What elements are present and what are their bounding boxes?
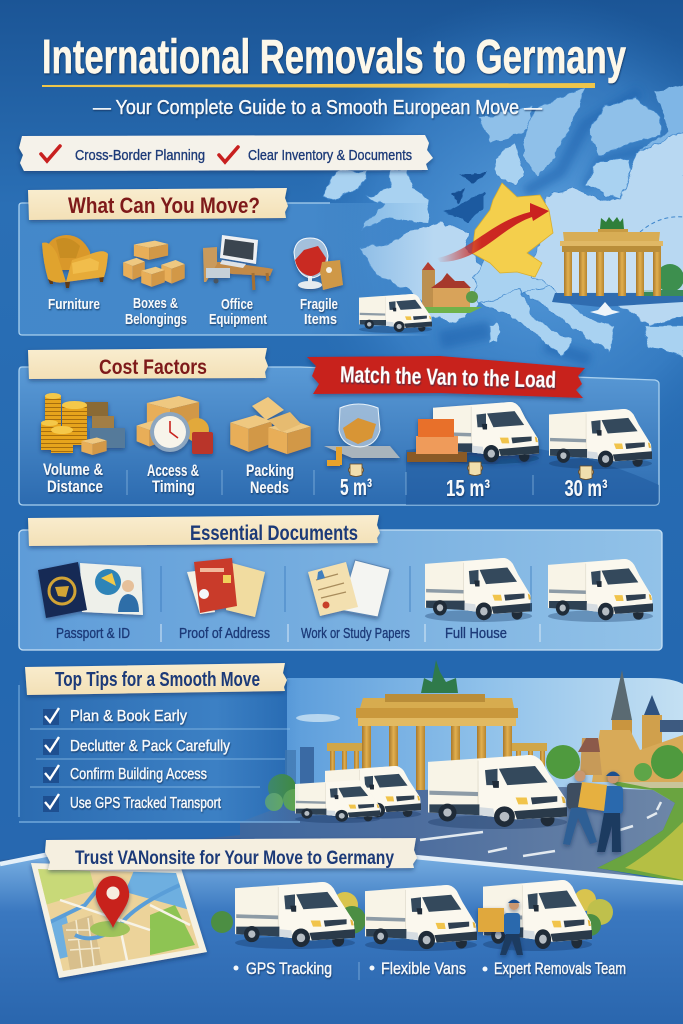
heading: top tips: Top Tips for a Smooth Move xyxy=(55,669,260,691)
title underline xyxy=(42,83,595,88)
icon and label: 15 m3: 15 m³ xyxy=(446,475,490,501)
label: fragile items: Fragile xyxy=(300,296,338,313)
banner: match the van to the load: Match the Van to the Load xyxy=(340,361,556,393)
icon: fleet van one xyxy=(235,882,355,949)
icon and label: 30 m3: 30 m³ xyxy=(564,475,608,501)
heading: essential documents xyxy=(28,515,380,546)
icon: fleet van two xyxy=(365,885,477,951)
tip: confirm building access: Confirm Building Access xyxy=(70,766,207,783)
tip: plan and book early: Plan & Book Early xyxy=(70,708,187,725)
banner: trust VANonsite: Trust VANonsite for Your Move to Germany xyxy=(75,848,394,869)
icon: bushes behind vans xyxy=(211,889,613,936)
icon: packing boxes xyxy=(230,397,311,454)
benefit strip: Cross-Border Planning xyxy=(75,147,205,164)
label: GPS tracking: GPS Tracking xyxy=(246,959,332,978)
icon: second van xyxy=(548,559,653,622)
icon and label: 5 m3: 5 m³ xyxy=(340,474,372,500)
heading: top tips xyxy=(25,663,287,695)
icon: coins and boxes xyxy=(41,393,125,455)
icon: small van xyxy=(295,780,380,823)
icon: red check two xyxy=(219,147,238,162)
label: packing needs xyxy=(246,461,294,497)
panel: essential documents xyxy=(19,515,662,650)
benefit strip: Clear Inventory & Documents xyxy=(248,147,412,164)
heading: cost factors xyxy=(28,348,268,379)
label: proof of address: Proof of Address xyxy=(179,625,270,642)
icon: proof of address xyxy=(187,558,265,617)
dividers xyxy=(161,566,531,612)
tip: use GPS tracked transport xyxy=(43,794,221,812)
label: fragile items: Items xyxy=(304,311,337,328)
label: office equipment: Equipment xyxy=(209,311,267,328)
icon: pallet and 15 m3 van xyxy=(407,402,539,464)
road xyxy=(0,787,683,900)
panel: what can you move xyxy=(19,188,434,335)
label: office equipment xyxy=(209,296,267,328)
icon: work or study papers xyxy=(308,560,390,617)
icon: cathedral and trees xyxy=(546,670,683,782)
icon: office desk xyxy=(203,235,273,290)
icon: van on map xyxy=(359,294,432,333)
label: packing needs: Packing xyxy=(246,461,294,480)
dividers xyxy=(127,470,533,495)
tip: use GPS tracked transport: Use GPS Tracked Transport xyxy=(70,795,221,812)
label: access and timing: Access & xyxy=(147,461,199,480)
label: flexible vans: Flexible Vans xyxy=(381,959,466,978)
label: expert removals team: Expert Removals Team xyxy=(494,959,626,978)
benefit strip xyxy=(19,135,433,171)
icon: Brandenburg Gate xyxy=(285,660,547,790)
icon: Brandenburg Gate on map xyxy=(552,217,683,316)
label: access and timing xyxy=(147,461,199,496)
panel: top tips xyxy=(19,663,300,822)
icon: large van xyxy=(428,755,567,829)
icon: movers carrying box xyxy=(563,770,623,852)
panel: cost factors xyxy=(19,348,659,505)
banner: match the van to the load xyxy=(307,356,585,398)
icon: fragile items xyxy=(294,238,343,290)
heading: cost factors: Cost Factors xyxy=(99,356,207,379)
heading: what can you move: What Can You Move? xyxy=(68,193,260,218)
icon: full house van xyxy=(425,558,532,622)
banner: trust VANonsite xyxy=(45,838,417,870)
label: boxes and belongings: Boxes & xyxy=(133,295,178,312)
icon: red check xyxy=(41,146,60,161)
icon and label: 30 m3 xyxy=(564,466,608,501)
map of Europe xyxy=(323,84,683,360)
subtitle: — Your Complete Guide to a Smooth European Move — xyxy=(93,97,542,119)
icon: middle van xyxy=(325,766,421,819)
tip: confirm building access xyxy=(43,765,207,783)
icon: moving boxes xyxy=(123,241,185,287)
icon: armchair xyxy=(42,235,108,288)
label: packing needs: Needs xyxy=(250,478,289,497)
label: fragile items xyxy=(300,296,338,328)
label: full house: Full House xyxy=(445,625,507,642)
icon: Germany highlighted with arrow xyxy=(437,183,553,277)
heading: essential documents: Essential Documents xyxy=(190,522,358,545)
label: volume and distance xyxy=(43,460,103,496)
label: work or study papers: Work or Study Papers xyxy=(301,625,410,642)
icon and label: 5 m3 xyxy=(340,464,372,500)
icon: tree xyxy=(265,774,305,811)
tip: declutter and pack carefully: Declutter & Pack Carefully xyxy=(70,738,230,755)
icon and label: 15 m3 xyxy=(446,462,490,501)
map with location pin xyxy=(30,860,210,980)
icon: location pin xyxy=(96,876,129,928)
label: passport and ID: Passport & ID xyxy=(56,625,130,642)
label: boxes and belongings xyxy=(125,295,187,328)
label: furniture: Furniture xyxy=(48,296,100,313)
grass verge xyxy=(597,772,683,882)
label: volume and distance: Distance xyxy=(47,477,103,496)
label: office equipment: Office xyxy=(221,296,253,313)
icon: passport and ID xyxy=(38,562,143,618)
icon: 30 m3 van xyxy=(549,409,652,469)
icon: glass on plate xyxy=(324,404,400,466)
label: access and timing: Timing xyxy=(152,477,195,496)
label: volume and distance: Volume & xyxy=(43,460,103,479)
icon: removals worker xyxy=(478,900,523,955)
section: bottom sea background xyxy=(0,852,683,1024)
heading: what can you move xyxy=(28,188,288,220)
seas darker xyxy=(440,92,645,360)
label: boxes and belongings: Belongings xyxy=(125,311,187,328)
icon: castle on map xyxy=(422,262,482,313)
icon: fleet van three xyxy=(483,880,592,951)
icon: clock and boxes xyxy=(137,396,213,454)
scene: Berlin street xyxy=(0,660,683,900)
